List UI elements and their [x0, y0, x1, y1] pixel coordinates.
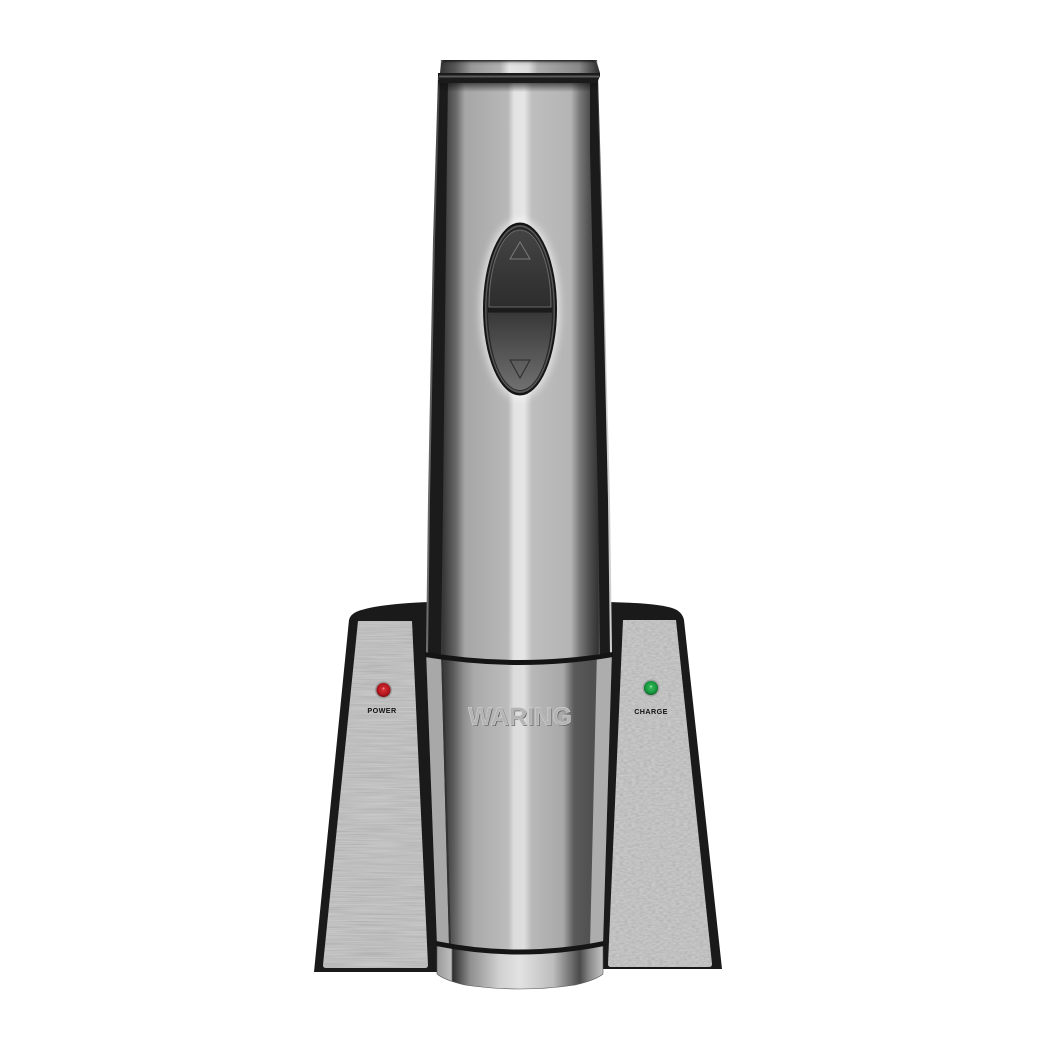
- charging stand, left side: [314, 602, 440, 972]
- up button: [489, 230, 551, 307]
- opener lower body: [426, 650, 612, 954]
- label: charge: CHARGE: [634, 707, 668, 716]
- left light edge strip: [426, 650, 449, 946]
- charge indicator light: [642, 680, 660, 696]
- right black reflection strip: [590, 78, 610, 655]
- label: power: POWER: [367, 706, 397, 715]
- down arrow: [510, 360, 530, 378]
- brand logo: WARING: [469, 704, 573, 732]
- power indicator light: [375, 682, 392, 698]
- up arrow: [510, 242, 530, 259]
- bottom collar ring: [436, 941, 604, 954]
- brushed panel: charge: [608, 620, 712, 967]
- right light edge strip: [590, 650, 612, 947]
- brand logo: WARING: [468, 703, 572, 731]
- charging stand, right side: [600, 602, 722, 969]
- top shading under the cap: [438, 80, 598, 92]
- opener upper body: [425, 76, 613, 665]
- opener base foot: [437, 946, 603, 989]
- up and down rocker switch: [480, 219, 560, 399]
- down button: [488, 313, 552, 390]
- opener top cap: [438, 60, 600, 83]
- body join ring: [425, 652, 613, 665]
- brushed panel: power: [323, 621, 428, 968]
- left black reflection strip: [428, 78, 448, 655]
